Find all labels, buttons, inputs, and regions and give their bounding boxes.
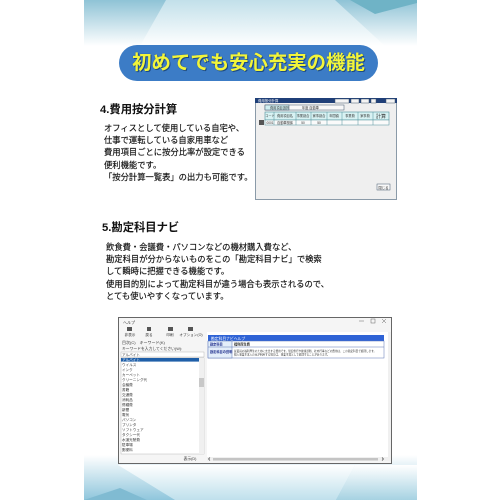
screenshot: allocation table window: 閉じる — [378, 185, 389, 190]
screenshot: help window: プリンタ — [122, 422, 137, 427]
text block: 4: 便利機能です。 — [104, 160, 161, 170]
screenshot: help window: 新聞 — [122, 407, 130, 412]
screenshot: allocation table window: 0001 — [266, 121, 274, 125]
title pill: 初めてでも安心充実の機能 — [132, 52, 365, 74]
screenshot: help window: 修繕費 — [122, 402, 133, 407]
text block: 5: 使用目的別によって勘定科目が違う場合も表示されるので、 — [106, 279, 329, 289]
screenshot: help window: 電気 — [122, 412, 130, 417]
text block: 4: 費用項目ごとに按分比率が設定できる — [104, 147, 245, 157]
screenshot: help window: 勘定科目ナビヘルプ — [211, 336, 245, 341]
screenshot: allocation table window: 事業費 — [345, 113, 356, 118]
screenshot: help window: カーペット — [122, 372, 140, 377]
screenshot: help window: 会議費 — [122, 382, 133, 387]
heading: 5: 5.勘定科目ナビ — [102, 222, 179, 234]
screenshot: help window: キーワードを入力してください(W): — [122, 346, 182, 351]
screenshot: help window: 従業員の福利厚生のために支出する費用です。慰安旅行や健康診断、社内行事などの費用は、この勘定科目で処理します。 — [234, 349, 376, 353]
screenshot: allocation table window: 50 — [317, 121, 321, 125]
screenshot: help window: 水道光熱費 — [122, 437, 140, 442]
screenshot: help window: アルバイト — [122, 352, 140, 357]
screenshot: allocation table window: 事業割合 — [297, 113, 310, 118]
screenshot: allocation table window: 年間額 — [329, 113, 340, 118]
text block: 5: 勘定科目が分からないものをこの「勘定科目ナビ」で検索 — [106, 254, 322, 264]
text block: 4: 「按分計算一覧表」の出力も可能です。 — [104, 172, 253, 182]
screenshot: help window: 交通費 — [122, 392, 133, 397]
screenshot: help window: アルバイト — [122, 357, 140, 362]
screenshot: allocation table window: コード — [265, 114, 275, 118]
screenshot: help window: 戻る — [145, 332, 153, 337]
screenshot: allocation table window: 年度 自動車 — [302, 105, 320, 110]
screenshot: allocation table window: 計算 — [376, 113, 386, 120]
screenshot: help window: 勘定科目 — [210, 342, 223, 346]
text block: 4 — [104, 123, 253, 182]
screenshot: help window: タクシー代 — [122, 432, 140, 437]
screenshot: allocation table window: 費用項目選択 — [270, 105, 290, 110]
screenshot: help window: 郵便料 — [122, 447, 133, 452]
screenshot: allocation table window: 50 — [301, 121, 305, 125]
text block: 5: 飲食費・会議費・パソコンなどの機材購入費など、 — [106, 242, 296, 252]
screenshot: help window: 勘定科目の説明 — [210, 349, 232, 354]
screenshot: help window: 書籍 — [122, 387, 130, 392]
screenshot: help window: インク — [122, 367, 133, 372]
text block: 5: して瞬時に把握できる機能です。 — [106, 266, 229, 276]
screenshot: help window: 非表示 — [125, 332, 136, 337]
title pill — [119, 45, 378, 81]
text block: 4: オフィスとして使用している自宅や、 — [104, 123, 244, 133]
screenshot: help window: クリーニング代 — [122, 377, 148, 382]
screenshot: allocation table window: 家事割合 — [313, 113, 326, 118]
screenshot: allocation table window — [255, 98, 397, 200]
screenshot: help window: 福利厚生費 — [234, 342, 251, 346]
screenshot: help window: オプション(O) — [179, 332, 203, 337]
screenshot: help window: 個人事業主本人のみが利用する場合は、事業主貸として処理することがあります。 — [234, 352, 330, 356]
screenshot: help window: 駐車場 — [122, 442, 133, 447]
screenshot: help window: 消耗品 — [122, 397, 133, 402]
screenshot: allocation table window: 家事費 — [360, 113, 371, 118]
screenshot: help window: パソコン — [122, 417, 137, 422]
screenshot: help window: ウイルス — [122, 362, 137, 367]
screenshot: help window: ソフトウェア — [122, 427, 144, 432]
text block: 4: 仕事で運転している自家用車など — [104, 135, 228, 145]
screenshot: help window — [118, 317, 392, 464]
text block: 5 — [106, 242, 329, 301]
screenshot: allocation table window: 自動車関係 — [277, 120, 294, 125]
screenshot: help window: 印刷 — [166, 332, 174, 337]
screenshot: help window: 表示(D) — [184, 456, 197, 461]
screenshot: help window: 目次(C) キーワード(K) — [122, 339, 166, 345]
heading: 4: 4.費用按分計算 — [100, 104, 177, 116]
screenshot: allocation table window: 費用項目名 — [277, 113, 293, 118]
screenshot: allocation table window: 費用按分計算 — [258, 98, 279, 103]
screenshot: help window: ヘルプ — [123, 319, 135, 325]
text block: 5: とても使いやすくなっています。 — [106, 291, 229, 301]
